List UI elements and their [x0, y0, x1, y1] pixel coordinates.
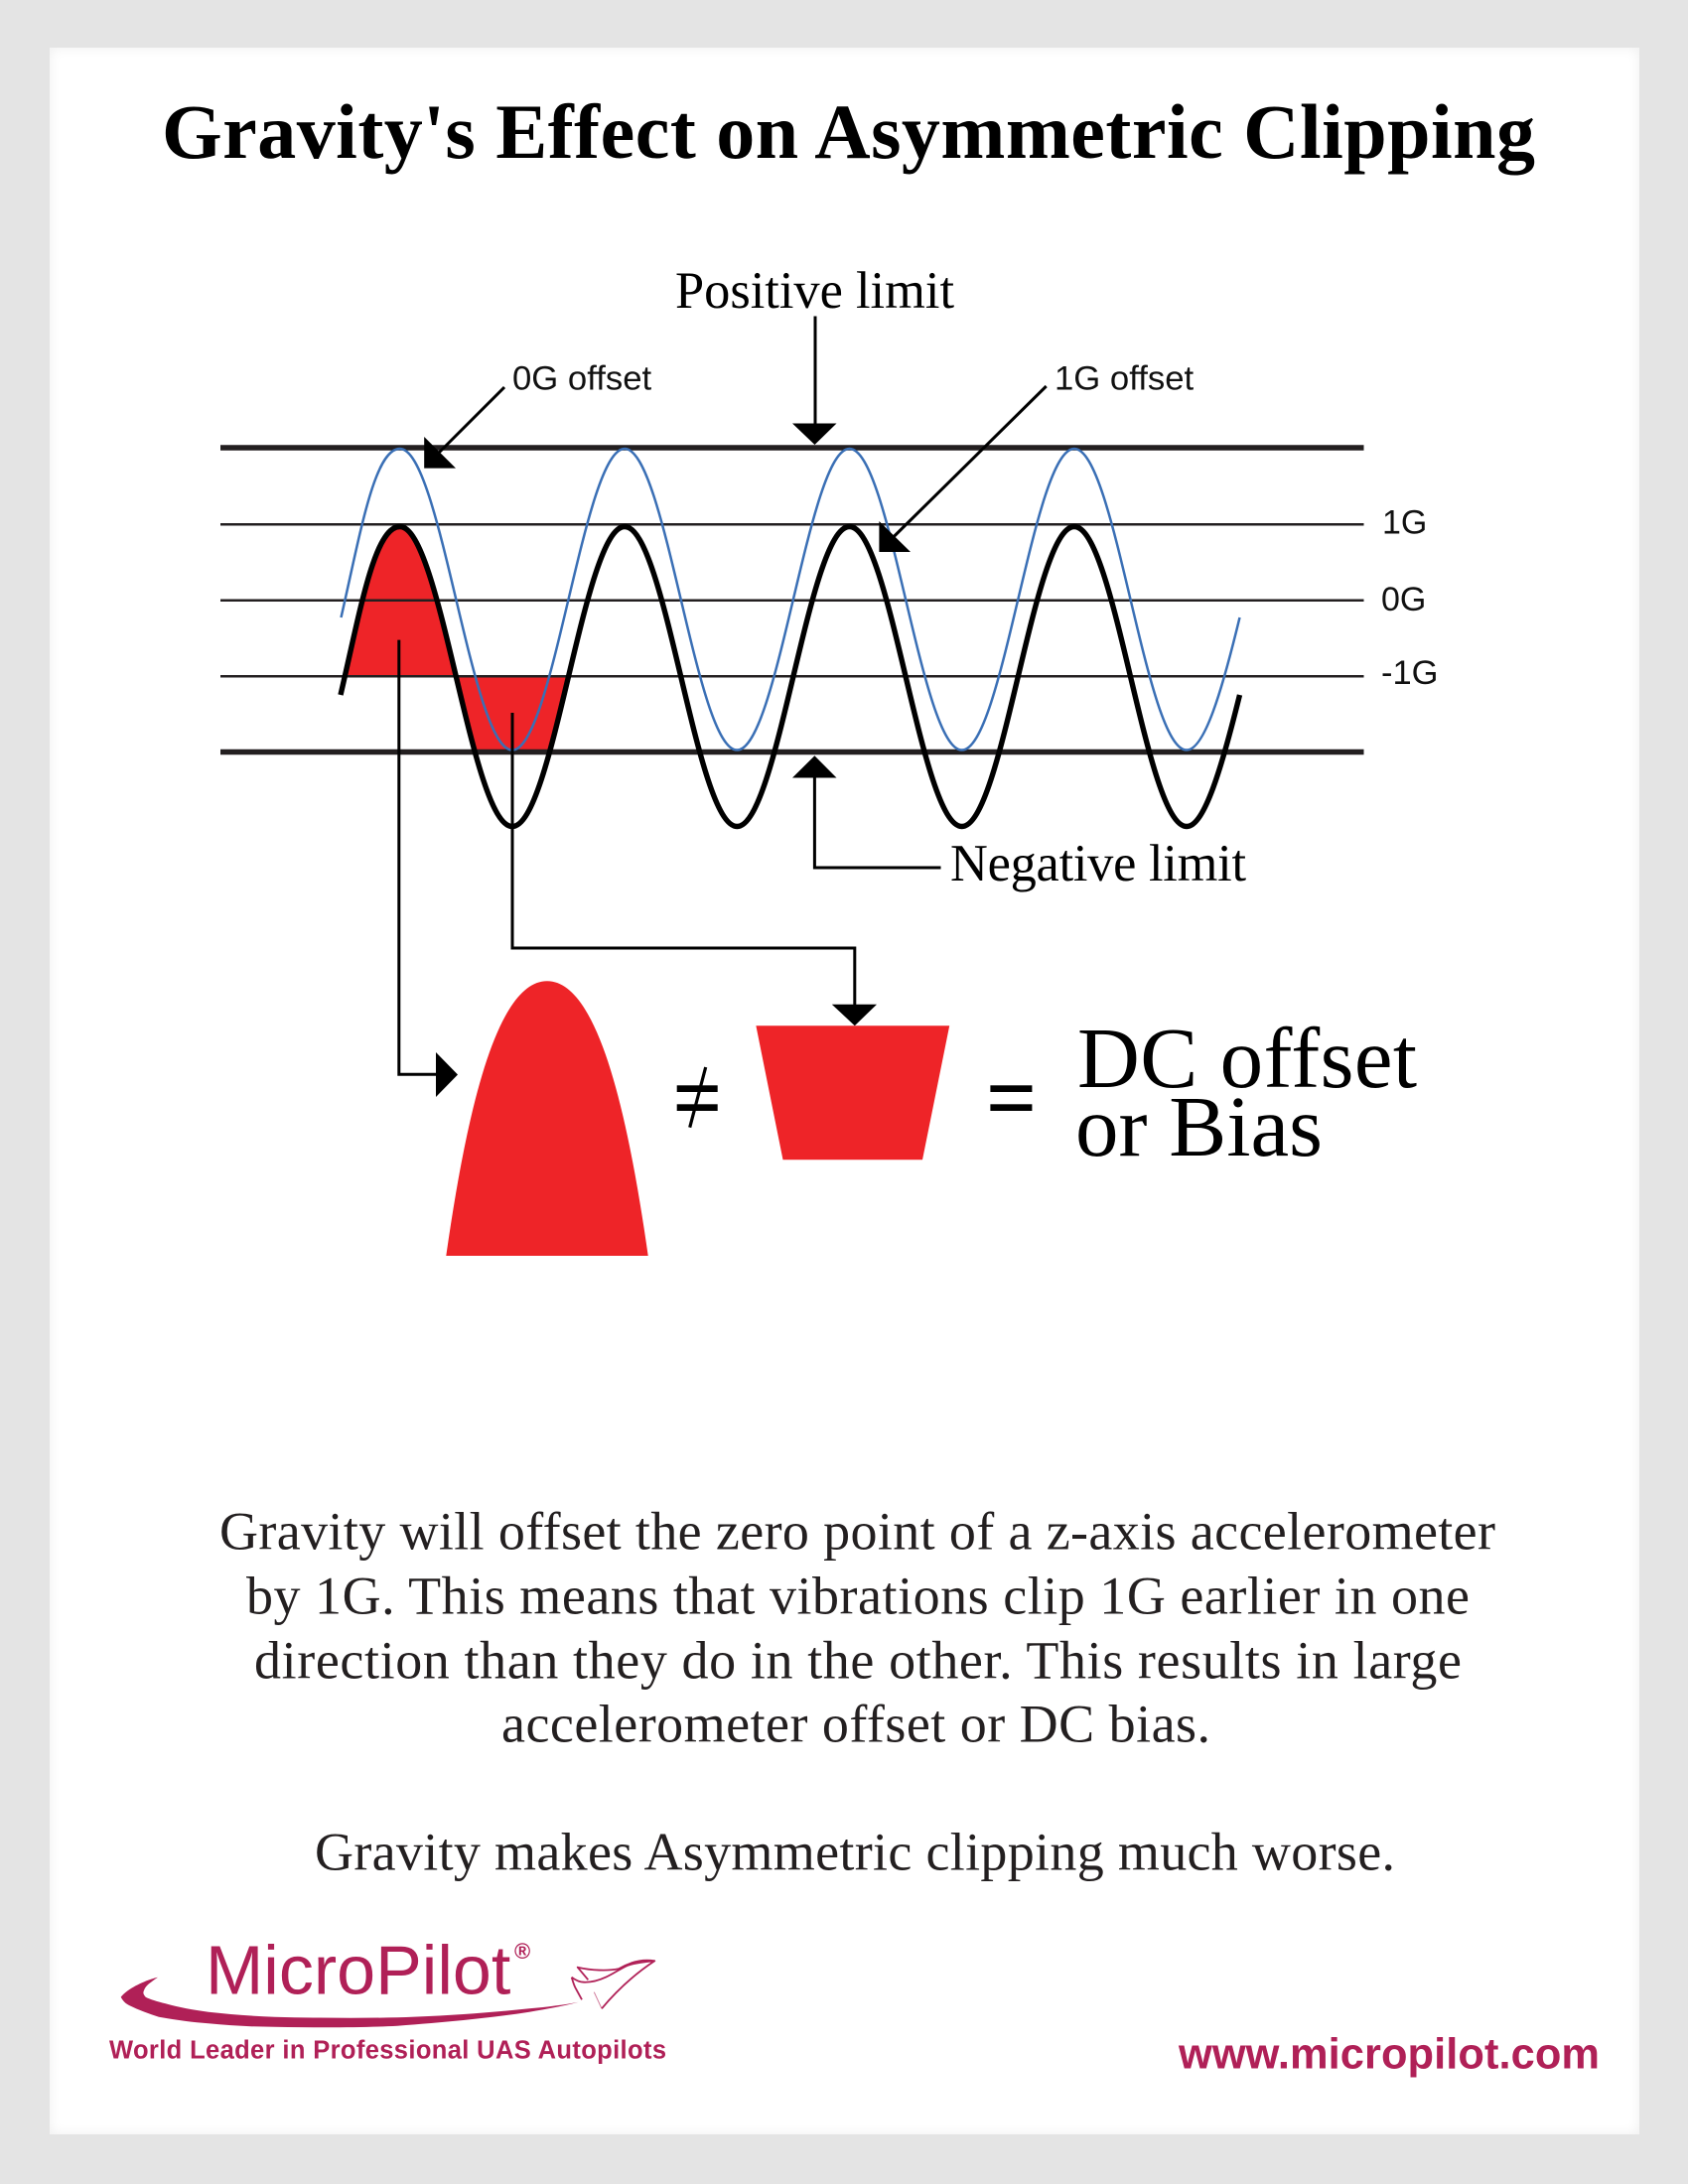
0G line	[220, 600, 1364, 602]
text block: explanation: accelerometer offset or DC bias.	[501, 1694, 1210, 1753]
arrow: negative limit	[792, 755, 941, 868]
red clipped peak area	[348, 529, 453, 675]
callout: positive limit	[675, 262, 954, 445]
arrow: 0G offset	[424, 387, 504, 469]
result label: DC offset or Bias: DC offset	[1077, 1010, 1417, 1106]
text block: explanation: Gravity will offset the zero point of a z-axis accelerometer	[219, 1501, 1495, 1561]
callout: 0G offset	[424, 359, 651, 469]
callout: 1G offset	[879, 359, 1194, 552]
-1G line	[220, 675, 1364, 678]
black wave: 1G offset	[341, 526, 1239, 826]
website address: www.micropilot.com	[1178, 2030, 1600, 2078]
text block: conclusion: Gravity makes Asymmetric clipping much worse.	[315, 1823, 1395, 1882]
axis label 1G: 1G	[1382, 504, 1427, 542]
arrow: 1G offset	[879, 386, 1047, 552]
text block: explanation: direction than they do in the other. This results in large	[254, 1630, 1462, 1690]
result label: DC offset or Bias	[1075, 1010, 1417, 1174]
1G line	[220, 523, 1364, 526]
axis label -1G: -1G	[1381, 654, 1439, 692]
equation: unequal clipped shapes	[446, 981, 1417, 1256]
callout: negative limit	[792, 755, 1246, 892]
text block: explanation	[219, 1501, 1495, 1753]
axis label 0G: 0G	[1381, 581, 1426, 618]
title: Gravity's Effect on Asymmetric Clipping	[162, 88, 1535, 175]
icon: paper plane	[572, 1961, 654, 2008]
callout: 0G offset: 0G offset	[512, 359, 651, 397]
logo tagline: World Leader in Professional UAS Autopilots	[109, 2036, 666, 2064]
equals sign	[990, 1085, 1032, 1111]
red clipped trough area	[459, 677, 566, 750]
arrow: from trough to trapezoid	[512, 713, 877, 1025]
negative limit line	[220, 750, 1364, 754]
registered mark: ®	[514, 1939, 530, 1964]
logo: MicroPilot	[109, 1931, 666, 2064]
chart: clipping waveforms	[220, 448, 1439, 826]
red trapezoid shape	[756, 1025, 949, 1160]
callout: positive limit: Positive limit	[675, 262, 954, 320]
not equal sign	[677, 1067, 718, 1128]
arrow: positive limit	[792, 316, 836, 445]
text block: explanation: by 1G. This means that vibrations clip 1G earlier in one	[246, 1567, 1470, 1626]
blue wave: 0G offset	[342, 449, 1239, 751]
logo swoosh	[121, 1978, 579, 2027]
red peak shape	[446, 981, 648, 1256]
callout: negative limit: Negative limit	[950, 835, 1246, 892]
callout: 1G offset: 1G offset	[1055, 359, 1194, 397]
positive limit line	[220, 445, 1364, 451]
arrow: from peak to peak shape	[399, 640, 458, 1097]
logo wordmark: MicroPilot	[206, 1931, 510, 2008]
infographic drawing	[109, 103, 1597, 2077]
result label: DC offset or Bias: or Bias	[1075, 1078, 1323, 1174]
